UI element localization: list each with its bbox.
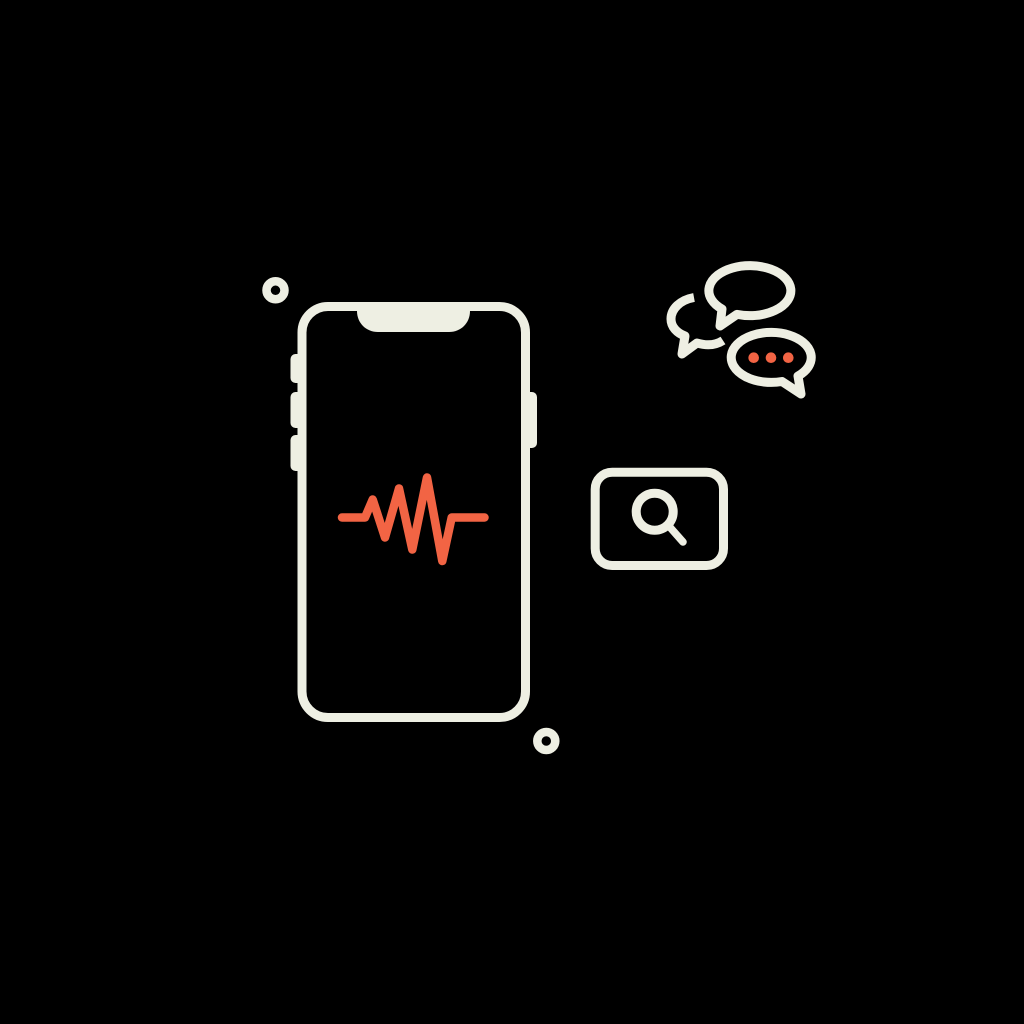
phone left side buttons xyxy=(290,354,304,471)
chat bubble: left xyxy=(671,298,723,354)
phone right side button xyxy=(522,392,537,448)
icon: phone xyxy=(290,304,537,718)
icon: search box xyxy=(595,472,724,566)
search box frame xyxy=(595,472,724,566)
phone body outline xyxy=(302,306,526,718)
magnifier handle xyxy=(668,525,683,542)
phone notch xyxy=(357,304,470,332)
icon: chat bubbles xyxy=(671,266,811,394)
chat bubble: bottom xyxy=(731,332,811,394)
icon: decorative ring bottom right xyxy=(537,732,555,750)
typing dots xyxy=(748,352,794,363)
magnifier lens xyxy=(636,493,673,530)
icon: decorative ring top left xyxy=(266,281,284,299)
icon: voice waveform xyxy=(342,478,484,561)
chat bubble: top xyxy=(709,266,791,326)
